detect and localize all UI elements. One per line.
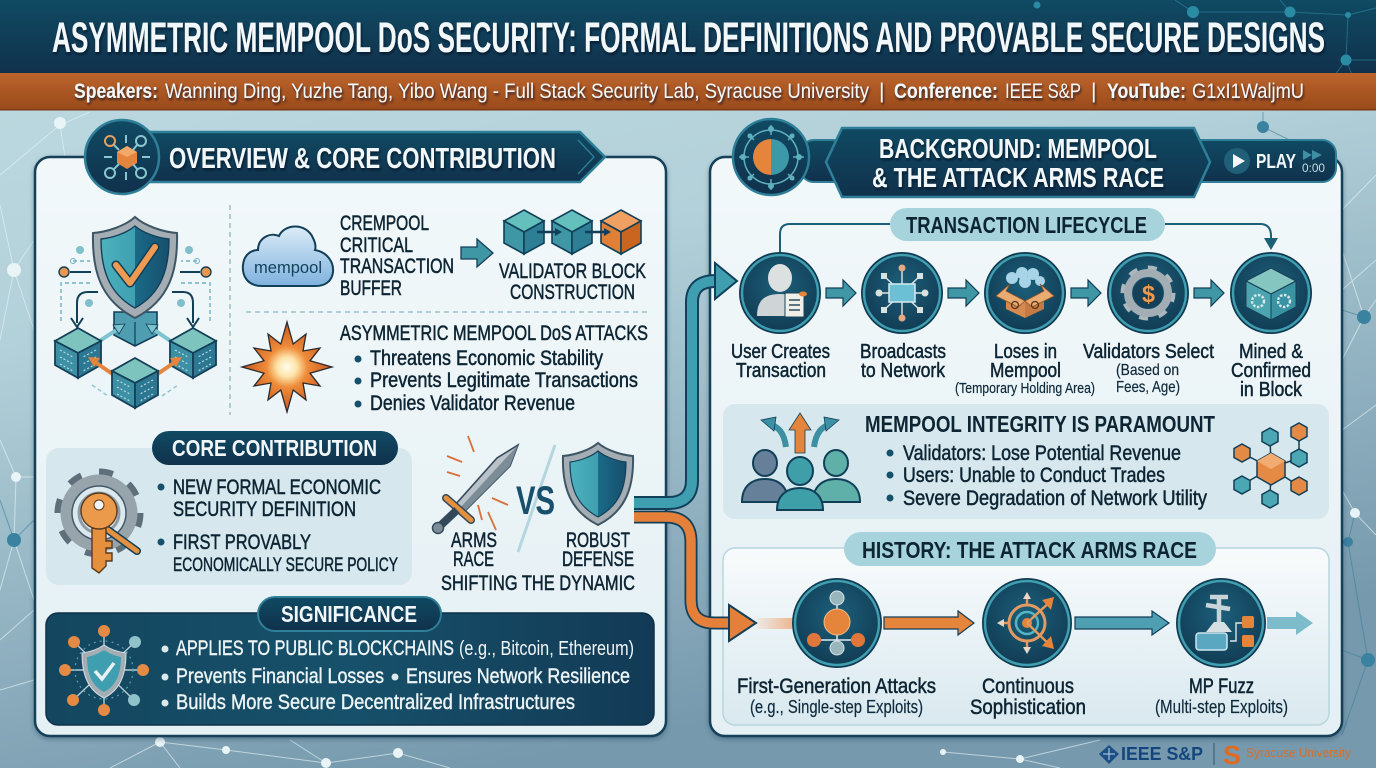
speakers and conference bar: |	[879, 80, 884, 103]
speakers and conference bar: Wanning Ding, Yuzhe Tang, Yibo Wang - Full Stack Security Lab, Syracuse University	[165, 80, 869, 103]
text: crempool critical transaction buffer: CRITICAL	[340, 234, 413, 257]
step: loses in mempool: Loses in	[994, 341, 1057, 363]
step: mined and confirmed: in Block	[1240, 379, 1303, 401]
step: validators select: Fees, Age)	[1116, 379, 1180, 396]
panel: overview and core contribution	[35, 120, 666, 736]
icon: explosion	[242, 322, 332, 412]
icon: gear and key	[61, 475, 137, 573]
icon: significance shield network	[59, 625, 149, 716]
title band	[0, 0, 1376, 95]
text: significance bullets: Prevents Financial Losses	[176, 665, 384, 688]
stage: mp fuzz: MP Fuzz	[1189, 675, 1254, 698]
text: arms race / robust defense: ROBUST	[566, 529, 630, 552]
panel: significance	[46, 597, 654, 725]
step: broadcasts to network: to Network	[861, 360, 946, 382]
speakers and conference bar: G1xI1WaljmU	[1192, 80, 1304, 103]
stage: continuous sophistication	[970, 578, 1086, 719]
text: crempool critical transaction buffer: BUFFER	[340, 277, 402, 300]
fade lead-in	[756, 618, 792, 629]
step: mined and confirmed: Confirmed	[1231, 360, 1311, 382]
icon: mempool cloud	[243, 226, 333, 286]
text: mempool integrity: Users: Unable to Conduct Trades	[903, 464, 1165, 487]
text: validator block construction: VALIDATOR BLOCK	[499, 260, 646, 283]
text: crempool critical transaction buffer: TRANSACTION	[340, 255, 454, 278]
logo: syracuse university: Syracuse University	[1246, 746, 1352, 760]
step: user creates transaction	[731, 252, 830, 382]
text: significance bullets: (e.g., Bitcoin, Ethereum)	[459, 638, 634, 660]
text: crempool critical transaction buffer: CREMPOOL	[340, 212, 429, 235]
step: mined and confirmed	[1230, 252, 1312, 401]
stage: continuous sophistication: Sophistication	[970, 696, 1086, 719]
pill: history heading: HISTORY: THE ATTACK ARMS RACE	[862, 537, 1197, 563]
pill: core contribution heading	[152, 431, 398, 465]
text: arms race / robust defense: SHIFTING THE DYNAMIC	[441, 572, 635, 595]
panel: background mempool and arms race	[634, 119, 1352, 768]
step: user creates transaction: User Creates	[731, 341, 830, 363]
text: significance bullets: APPLIES TO PUBLIC BLOCKCHAINS	[176, 637, 454, 660]
text: contribution bullets	[158, 476, 398, 576]
pill: significance heading: SIGNIFICANCE	[281, 601, 417, 627]
stage: first-generation attacks: First-Generation Attacks	[737, 675, 936, 698]
icon: shield with check over blocks	[55, 217, 216, 408]
icon: hexagon network	[1234, 423, 1307, 508]
step: broadcasts to network	[860, 252, 946, 382]
stage: mp fuzz: (Multi-step Exploits)	[1155, 697, 1288, 717]
arrow: step 1 to 2	[826, 280, 856, 306]
text: significance bullets	[162, 637, 634, 714]
background heading banner with play control	[733, 119, 1336, 197]
stage: first-generation attacks	[737, 578, 936, 717]
background heading banner with play control: & THE ATTACK ARMS RACE	[872, 162, 1164, 193]
stage: mp fuzz	[1155, 578, 1288, 717]
stage: first-generation attacks: (e.g., Single-step Exploits)	[750, 697, 923, 717]
text: mempool integrity: Validators: Lose Potential Revenue	[903, 442, 1181, 465]
arrow: step 4 to 5	[1194, 280, 1224, 306]
icon: mempool cloud: mempool	[254, 258, 322, 277]
text: contribution bullets: SECURITY DEFINITION	[173, 498, 356, 521]
text: arms race / robust defense: ARMS	[451, 529, 497, 552]
text: asymmetric mempool attacks: ASYMMETRIC MEMPOOL DoS ATTACKS	[340, 322, 648, 345]
text: contribution bullets: FIRST PROVABLY	[173, 531, 311, 554]
text: significance bullets: Ensures Network Resilience	[406, 665, 630, 688]
connector: teal pipe to lifecycle	[634, 263, 737, 503]
arrow: to validator block construction	[461, 239, 493, 267]
logo: ieee s&p: IEEE S&P	[1121, 744, 1203, 764]
icon: validator block chain	[504, 210, 641, 254]
play control: PLAY	[1256, 151, 1297, 173]
transaction lifecycle heading and bypass line	[780, 208, 1278, 253]
play control: 0:00	[1302, 163, 1325, 175]
text: asymmetric mempool attacks: Threatens Economic Stability	[370, 347, 603, 370]
icon: people with arrows	[742, 413, 860, 510]
icon: sword versus shield: VS	[516, 479, 555, 523]
background heading banner with play control: BACKGROUND: MEMPOOL	[879, 133, 1157, 164]
arrow: step 2 to 3	[948, 280, 979, 306]
step: loses in mempool	[955, 252, 1095, 397]
step: mined and confirmed: Mined &	[1239, 341, 1304, 363]
text: arms race / robust defense	[441, 529, 635, 595]
overview heading banner	[85, 120, 605, 194]
panel: core contribution	[46, 431, 412, 585]
arrow: step 3 to 4	[1071, 280, 1101, 306]
text: crempool critical transaction buffer	[340, 212, 454, 300]
step: broadcasts to network: Broadcasts	[860, 341, 946, 363]
text: mempool integrity	[865, 411, 1215, 510]
text: arms race / robust defense: DEFENSE	[562, 548, 634, 571]
transaction lifecycle heading and bypass line: TRANSACTION LIFECYCLE	[906, 212, 1147, 238]
footer logos	[1099, 740, 1352, 768]
play control	[1224, 148, 1325, 175]
step: loses in mempool: Mempool	[990, 360, 1061, 382]
text: asymmetric mempool attacks	[340, 322, 648, 415]
pill: history heading	[844, 532, 1216, 566]
step: validators select: (Based on	[1116, 362, 1179, 379]
connector: orange pipe to history	[634, 517, 756, 641]
speakers and conference bar	[0, 73, 1376, 110]
speakers and conference bar: YouTube:	[1107, 80, 1186, 103]
step: loses in mempool: (Temporary Holding Area)	[955, 380, 1095, 397]
text: significance bullets: Builds More Secure Decentralized Infrastructures	[176, 691, 575, 714]
speakers and conference bar: Speakers:	[74, 80, 158, 103]
text: mempool integrity: Severe Degradation of Network Utility	[903, 487, 1207, 510]
speakers and conference bar: IEEE S&P	[1005, 80, 1081, 103]
text: mempool integrity: MEMPOOL INTEGRITY IS PARAMOUNT	[865, 411, 1215, 437]
text: contribution bullets: NEW FORMAL ECONOMIC	[173, 476, 381, 499]
stage: continuous sophistication: Continuous	[982, 675, 1074, 698]
step: validators select: Validators Select	[1083, 341, 1214, 363]
text: asymmetric mempool attacks: Prevents Legitimate Transactions	[370, 369, 638, 392]
panel: history attack arms race	[723, 532, 1329, 725]
text: arms race / robust defense: RACE	[453, 548, 494, 571]
arrow: continuing trend	[1267, 611, 1313, 635]
speakers and conference bar: Conference:	[894, 80, 998, 103]
pill: significance heading	[258, 597, 441, 631]
icon: sword versus shield	[432, 436, 633, 552]
text: asymmetric mempool attacks: Denies Validator Revenue	[370, 392, 575, 415]
overview heading banner: OVERVIEW & CORE CONTRIBUTION	[169, 143, 556, 175]
panel: mempool integrity	[723, 404, 1329, 519]
text: contribution bullets: ECONOMICALLY SECURE POLICY	[173, 555, 398, 576]
arrow: first to second stage	[884, 611, 974, 635]
step: validators select	[1083, 252, 1214, 396]
speakers and conference bar: |	[1091, 80, 1096, 103]
arrow: second to third stage	[1075, 611, 1169, 635]
text: validator block construction	[499, 260, 646, 304]
step: user creates transaction: Transaction	[736, 360, 826, 382]
text: validator block construction: CONSTRUCTION	[510, 281, 635, 304]
logo: syracuse university	[1223, 740, 1352, 768]
step: validators select: $	[1142, 281, 1156, 308]
pill: core contribution heading: CORE CONTRIBUTION	[172, 435, 377, 461]
